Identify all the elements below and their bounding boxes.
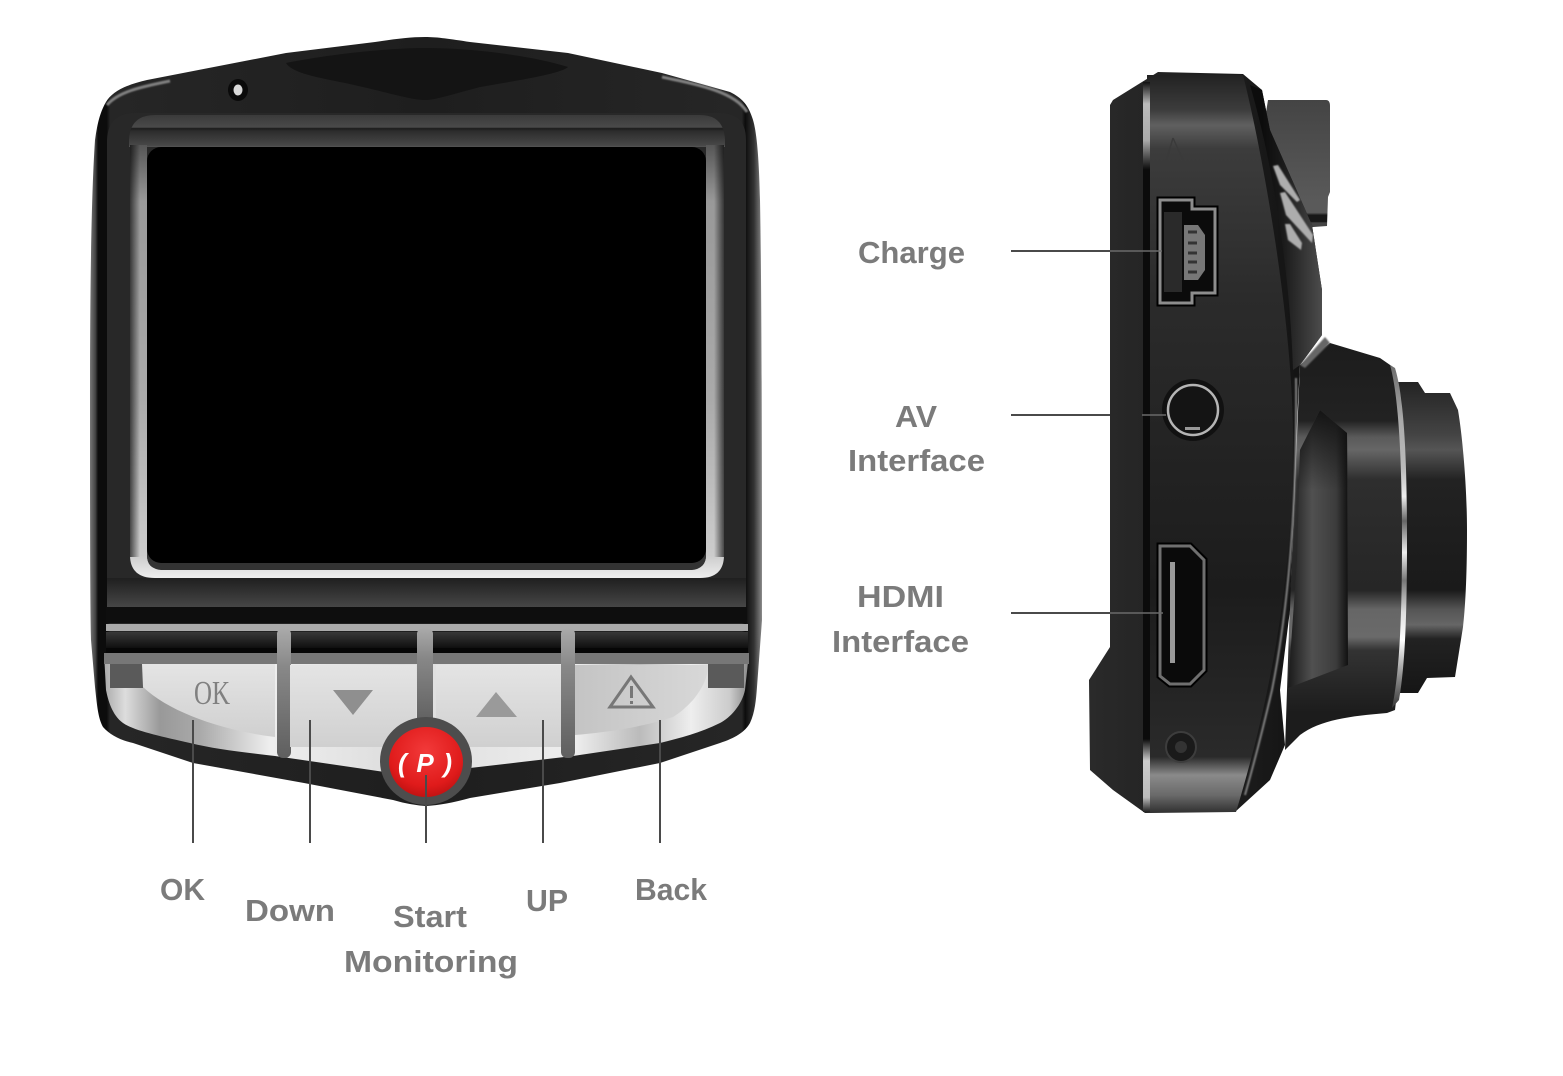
lens barrel (1398, 382, 1467, 693)
label: HDMI Interface: HDMI (857, 579, 944, 614)
screen bezel (129, 115, 725, 578)
leader lines (193, 251, 1166, 843)
indicator light (228, 79, 248, 101)
label: Start Monitoring: Start (393, 899, 467, 934)
lower control band (106, 607, 748, 654)
label: Start Monitoring (344, 899, 518, 979)
label: AV Interface: Interface (848, 443, 985, 478)
HDMI port (1160, 546, 1204, 684)
divider tabs (277, 628, 575, 758)
face gradient strip (107, 578, 746, 607)
neck highlight (1300, 337, 1330, 368)
label: Charge: Charge (858, 235, 965, 270)
mount bracket (1260, 100, 1330, 228)
OK button: OK (194, 675, 230, 712)
label: Back: Back (635, 872, 708, 907)
neck section (1250, 85, 1322, 370)
label: OK: OK (160, 872, 206, 907)
OK button (142, 664, 275, 737)
side main body (1089, 72, 1322, 813)
lens silver ring (1390, 365, 1407, 708)
tray top rail (104, 653, 749, 664)
back button (575, 665, 708, 735)
silver button tray (104, 653, 749, 772)
label: AV Interface: AV (895, 399, 937, 434)
front rim (1143, 82, 1150, 812)
speaker recess (286, 48, 568, 100)
mini USB port (1160, 200, 1215, 303)
lens housing (1285, 343, 1405, 750)
printed model marks (1273, 165, 1313, 250)
small status mark (1165, 138, 1183, 165)
down button (290, 665, 416, 747)
side view of camera (1089, 72, 1467, 813)
main side plate (1147, 75, 1293, 812)
label: HDMI Interface (832, 579, 969, 659)
start monitoring button (380, 717, 472, 805)
housing recessed panel (1288, 410, 1348, 688)
AV jack (1162, 379, 1224, 441)
label: Start Monitoring: Monitoring (344, 944, 518, 979)
start monitoring button: (P) (398, 748, 452, 778)
front body (90, 37, 762, 806)
reset screw (1166, 732, 1196, 762)
label: AV Interface (848, 399, 985, 478)
lower face panel (107, 113, 746, 607)
front view of camera (90, 37, 762, 806)
body edge highlight (1245, 378, 1296, 795)
label: UP: UP (526, 883, 568, 918)
tray corner shadows (110, 664, 744, 688)
up button (436, 665, 561, 747)
display screen (147, 147, 706, 570)
label: HDMI Interface: Interface (832, 624, 969, 659)
label: Down: Down (245, 893, 335, 928)
top edge highlights (107, 77, 747, 112)
